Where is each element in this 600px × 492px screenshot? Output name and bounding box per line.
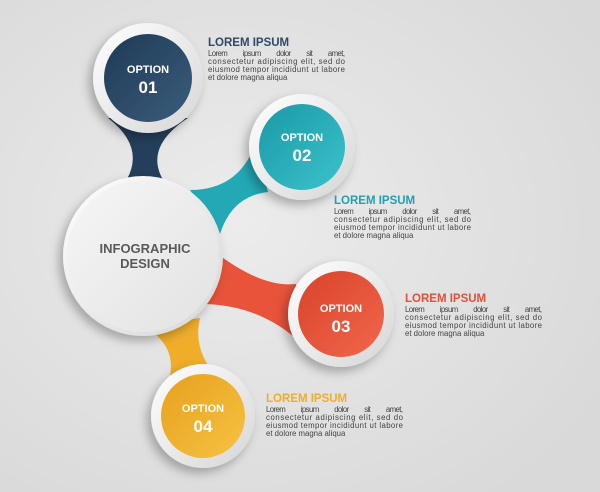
- option 3 circle: OPTION: [320, 303, 362, 315]
- text block 3: Lorem ipsum dolor sit amet,: [405, 305, 542, 314]
- option 1 circle: OPTION: [127, 64, 169, 76]
- text block 2: [334, 195, 472, 240]
- text block 3: consectetur adipiscing elit, sed do: [405, 313, 543, 322]
- text block 4: [266, 393, 404, 438]
- text block 4: eiusmod tempor incididunt ut labore: [266, 421, 403, 430]
- text: DESIGN: [120, 256, 170, 271]
- text block 3: LOREM IPSUM: [405, 293, 486, 305]
- text block 2: LOREM IPSUM: [334, 195, 415, 207]
- option 2 circle: 02: [293, 146, 311, 165]
- option 1 circle: [93, 23, 203, 133]
- option 4 circle: 04: [194, 417, 213, 436]
- option 1 circle: 01: [139, 78, 157, 97]
- text block 2: consectetur adipiscing elit, sed do: [334, 215, 472, 224]
- text block 3: et dolore magna aliqua: [405, 329, 485, 338]
- connector: option 2: [190, 145, 268, 234]
- connector: option 3: [206, 252, 302, 344]
- option 3 circle: [288, 261, 394, 367]
- text block 4: consectetur adipiscing elit, sed do: [266, 413, 404, 422]
- center circle: [63, 176, 223, 336]
- text block 1: Lorem ipsum dolor sit amet,: [208, 49, 345, 58]
- text block 3: eiusmod tempor incididunt ut labore: [405, 321, 542, 330]
- text block 1: LOREM IPSUM: [208, 37, 289, 49]
- text block 1: consectetur adipiscing elit, sed do: [208, 57, 346, 66]
- center label: INFOGRAPHIC: [100, 241, 191, 256]
- option 3 circle: 03: [332, 317, 350, 336]
- text block 2: Lorem ipsum dolor sit amet,: [334, 207, 471, 216]
- text block 2: et dolore magna aliqua: [334, 231, 414, 240]
- option 2 circle: [249, 94, 355, 200]
- text block 3: [405, 293, 543, 338]
- text block 1: et dolore magna aliqua: [208, 73, 288, 82]
- connector: option 1: [108, 118, 188, 192]
- text block 1: [208, 37, 346, 82]
- text block 1: eiusmod tempor incididunt ut labore: [208, 65, 345, 74]
- text block 4: LOREM IPSUM: [266, 393, 347, 405]
- connector: option 4: [143, 318, 220, 384]
- text block 2: eiusmod tempor incididunt ut labore: [334, 223, 471, 232]
- text block 4: Lorem ipsum dolor sit amet,: [266, 405, 403, 414]
- text block 4: et dolore magna aliqua: [266, 429, 346, 438]
- option 4 circle: [151, 364, 255, 468]
- option 2 circle: OPTION: [281, 132, 323, 144]
- option 4 circle: OPTION: [182, 403, 224, 415]
